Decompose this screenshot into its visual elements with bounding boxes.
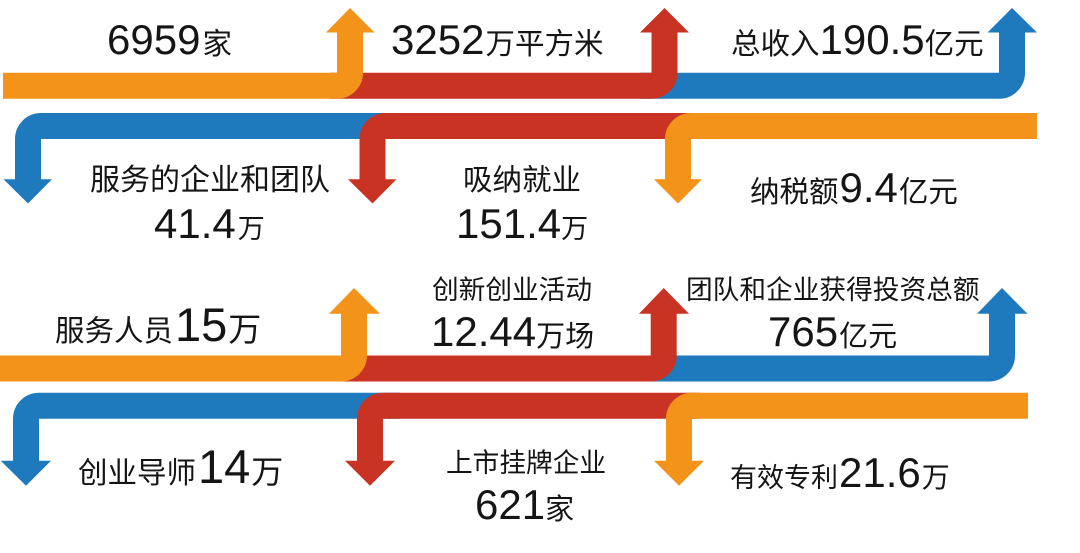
arrow: red up [330,288,689,368]
stat label: 服务的企业和团队: 服务的企业和团队 [90,164,330,197]
stat value: 151.4万: 151.4万 [456,200,588,247]
arrow: orange down [654,406,1028,486]
arrow: blue up [640,288,1028,368]
stat label: 上市挂牌企业: 上市挂牌企业 [446,448,606,478]
stat value: 621家: 621家 [475,481,574,528]
stat: 创业导师14万: 创业导师14万 [78,440,283,493]
panel: row 4 downward arrows [1,406,1028,486]
stat: 服务人员15万: 服务人员15万 [55,298,261,351]
arrow: red down [348,126,700,204]
arrow: blue up [640,8,1037,86]
stat label: 吸纳就业: 吸纳就业 [463,164,581,197]
stat: 6959家: 6959家 [107,16,232,63]
stat: 总收入190.5亿元: 总收入190.5亿元 [731,16,984,63]
stat value: 765亿元: 765亿元 [768,308,897,355]
stat: 3252万平方米: 3252万平方米 [391,16,603,63]
arrow: blue down [1,406,400,486]
arrow: orange up [0,288,380,368]
stat value: 41.4万: 41.4万 [154,200,265,247]
arrow: orange up [3,8,374,86]
arrow: orange down [654,126,1037,204]
stat label: 团队和企业获得投资总额: 团队和企业获得投资总额 [686,275,980,305]
stat: 有效专利21.6万: 有效专利21.6万 [730,449,950,496]
arrow: blue down [4,126,400,204]
arrow: red up [330,8,689,86]
stat value: 12.44万场: 12.44万场 [431,308,594,355]
panel: row 1 upward arrows [3,8,1037,86]
stat label: 创新创业活动: 创新创业活动 [432,275,592,305]
panel: row 2 downward arrows [4,126,1037,204]
stat: 纳税额9.4亿元: 纳税额9.4亿元 [750,164,958,211]
panel: row 3 upward arrows [0,288,1028,368]
arrow: red down [345,406,700,486]
